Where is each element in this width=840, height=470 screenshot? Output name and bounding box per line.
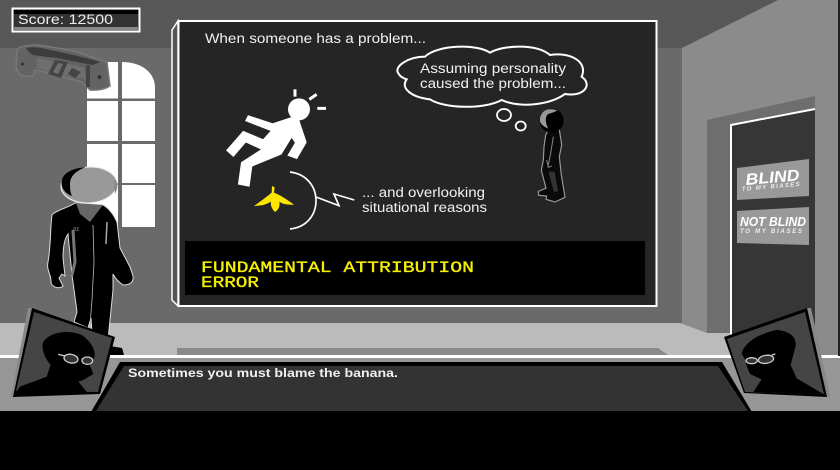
- head helmet: [60, 165, 118, 205]
- icon: banana peel: [254, 186, 294, 212]
- thought text: [420, 61, 566, 91]
- sign: not blind: NOT BLIND: [740, 215, 806, 229]
- term text: ERROR: [201, 274, 259, 292]
- thought text: Assuming personality: [420, 61, 566, 76]
- right portrait: [724, 308, 830, 397]
- thought dots: [497, 109, 526, 130]
- sign: blind: TO MY BIASES: [742, 182, 800, 193]
- character in jumpsuit: [48, 165, 133, 355]
- character in jumpsuit: 01: [73, 227, 79, 233]
- thought bubble: [397, 47, 587, 107]
- term banner: [185, 241, 645, 295]
- board intro text: When someone has a problem...: [205, 31, 426, 46]
- score text: Score: 12500: [18, 12, 113, 27]
- thought text: caused the problem...: [420, 76, 566, 91]
- term text: FUNDAMENTAL ATTRIBUTION: [201, 259, 474, 277]
- left portrait: [11, 308, 115, 397]
- dialog box: [91, 362, 752, 412]
- term text: [201, 259, 474, 292]
- score box: [12, 8, 140, 32]
- focus arc and lightning pointer: [290, 172, 354, 229]
- situational reasons text: [362, 185, 487, 215]
- situational reasons text: ... and overlooking: [362, 185, 485, 200]
- icon: headset belt: [16, 45, 110, 90]
- sign: not blind: [737, 207, 809, 245]
- small observer figure: [538, 109, 565, 202]
- situational reasons text: situational reasons: [362, 200, 487, 215]
- icon: falling figure: [227, 89, 326, 186]
- window: [87, 62, 155, 227]
- sign: blind: [737, 159, 809, 200]
- dialog text: Sometimes you must blame the banana.: [128, 366, 398, 380]
- sign: not blind: TO MY BIASES: [740, 229, 802, 235]
- door recess: [707, 96, 815, 335]
- sign: blind: BLIND: [745, 167, 801, 189]
- board panel: [172, 21, 656, 306]
